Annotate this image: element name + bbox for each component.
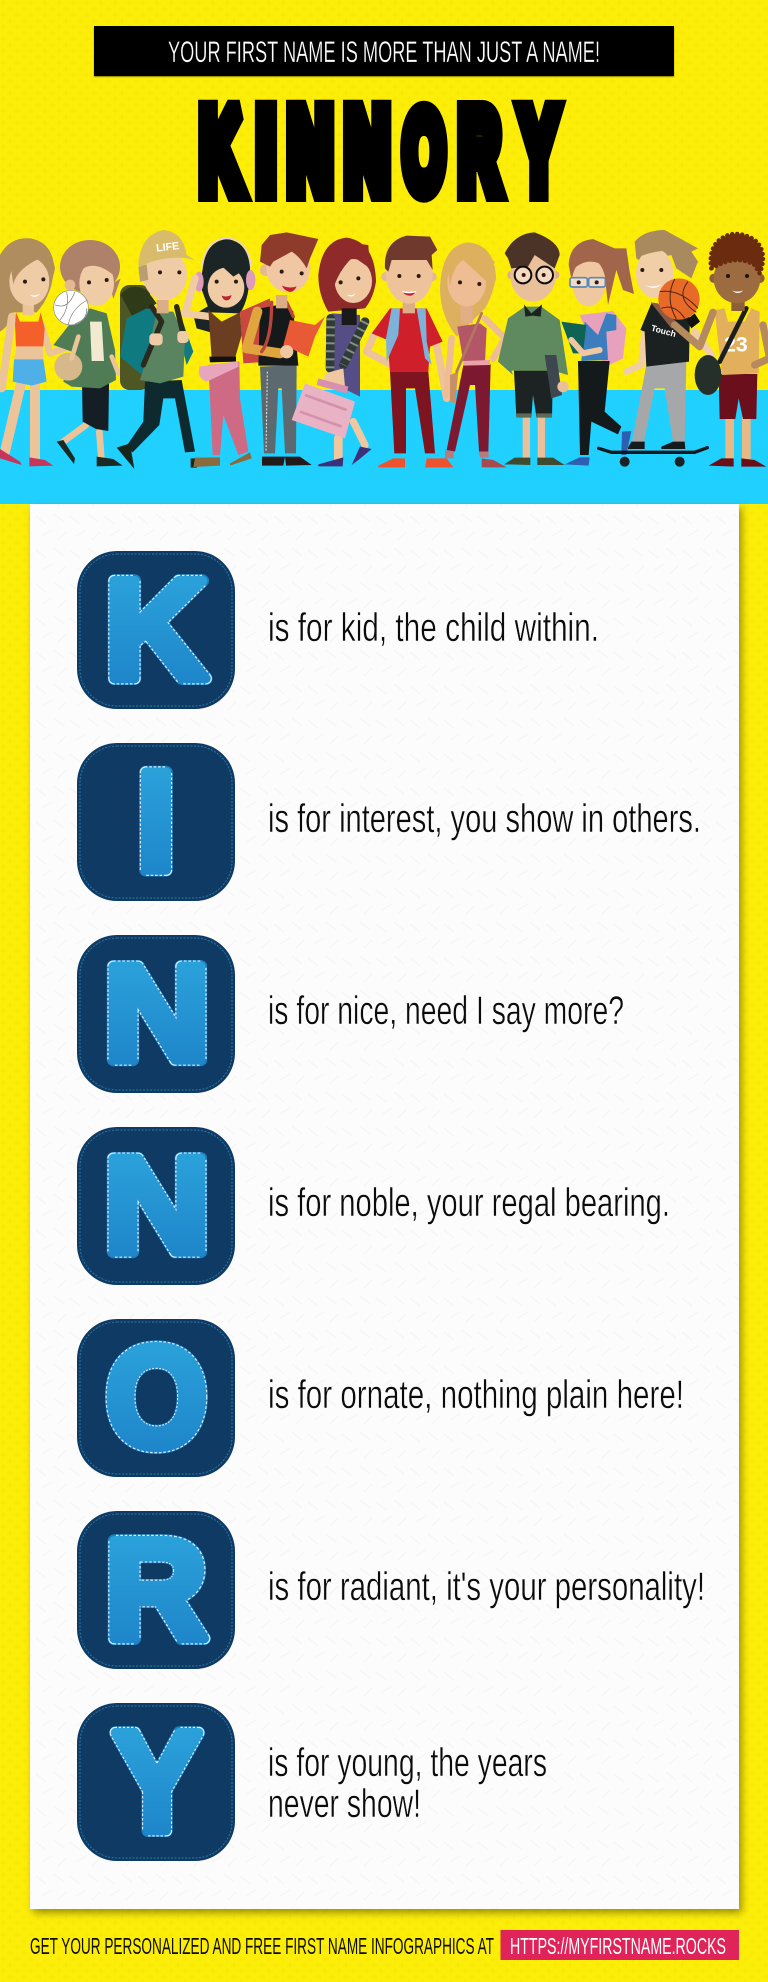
icon: letter tile R: R [105,1510,207,1670]
icon: letter tile O [77,1317,235,1477]
title: name: K [200,88,242,216]
text: N meaning: is for nice, need I say more? [268,989,624,1033]
header banner [94,26,674,76]
person: boy on skateboard with basketball: Touch [650,323,677,339]
icon: letter tile I: I [136,742,176,901]
person: boy on skateboard with basketball [599,230,711,467]
icon: letter tile K: K [105,550,207,710]
icon: letter tile I: I [136,742,176,901]
person: girl in green jacket with volleyball [53,240,123,466]
icon: letter tile N: N [104,937,210,1090]
icon: basketball [658,278,700,320]
icon: letter tile O: O [106,1317,207,1476]
person: boy with curly hair and sports jersey: 23 [724,333,748,357]
icon: letter tile I [77,742,235,901]
person: boy with hat and large backpack [117,230,200,469]
title: name [200,87,558,216]
title: name: N [288,87,332,215]
text: Y meaning: is for young, the years [268,1741,547,1785]
text: Y meaning: never show! [268,1782,421,1826]
title: name: O [403,90,445,215]
icon: letter tile O: O [106,1317,207,1476]
icon: letter tile Y [77,1703,235,1862]
icon: letter tile Y: Y [113,1703,201,1862]
text: Y meaning [268,1741,547,1826]
title: name: R [459,88,500,216]
icon: letter tile N: N [104,937,210,1090]
icon: letter tile Y: Y [113,1703,201,1862]
icon: letter tile N: N [104,937,210,1090]
icon: letter tile K: K [105,550,207,710]
person: girl in orange top [0,238,77,466]
title: name: N [345,87,389,215]
icon: letter tile R [77,1510,235,1670]
illustration: group of young people, left part [0,230,255,469]
row: letter O [77,1317,684,1477]
blue ground band [0,390,768,504]
person: girl with ponytail, tablet and pink backpack [561,239,634,466]
icon: letter tile N [77,1127,235,1285]
icon: letter tile K [77,550,235,710]
person: girl with red hair and pink bag [292,238,376,466]
person: blonde girl in pink top [440,242,507,467]
row: letter K [77,550,599,710]
illustration: group of young people, right part [498,230,768,467]
icon: letter tile N: N [104,1129,210,1282]
row: letter I [77,742,701,901]
row: letter Y [77,1703,547,1862]
icon: letter tile Y: Y [113,1703,201,1862]
icon: letter tile I: I [136,742,176,901]
person: boy with red backpack and book [240,232,325,466]
panel: letter meanings [30,504,739,1909]
row: letter N [77,935,624,1093]
person: boy with curly hair and sports jersey [675,234,768,467]
person: boy with glasses in green sweater [498,232,569,465]
icon: letter tile R: R [105,1510,207,1670]
title: name: Y [520,88,558,216]
icon: letter tile O: O [106,1317,207,1476]
person: boy with hat and large backpack: LIFE [156,240,180,255]
icon: letter tile K: K [105,550,207,710]
row: letter N second [77,1127,670,1285]
person: girl with pink headphones [185,238,255,467]
icon: letter tile N: N [104,1129,210,1282]
icon: letter tile N [77,935,235,1093]
icon: letter tile N: N [104,1129,210,1282]
row: letter R [77,1510,705,1670]
title: name: I [257,87,275,215]
person: boy in red t-shirt [367,236,453,467]
text: K meaning: is for kid, the child within. [268,606,599,650]
icon: letter tile R: R [105,1510,207,1670]
illustration: group of young people, middle part [240,232,507,467]
